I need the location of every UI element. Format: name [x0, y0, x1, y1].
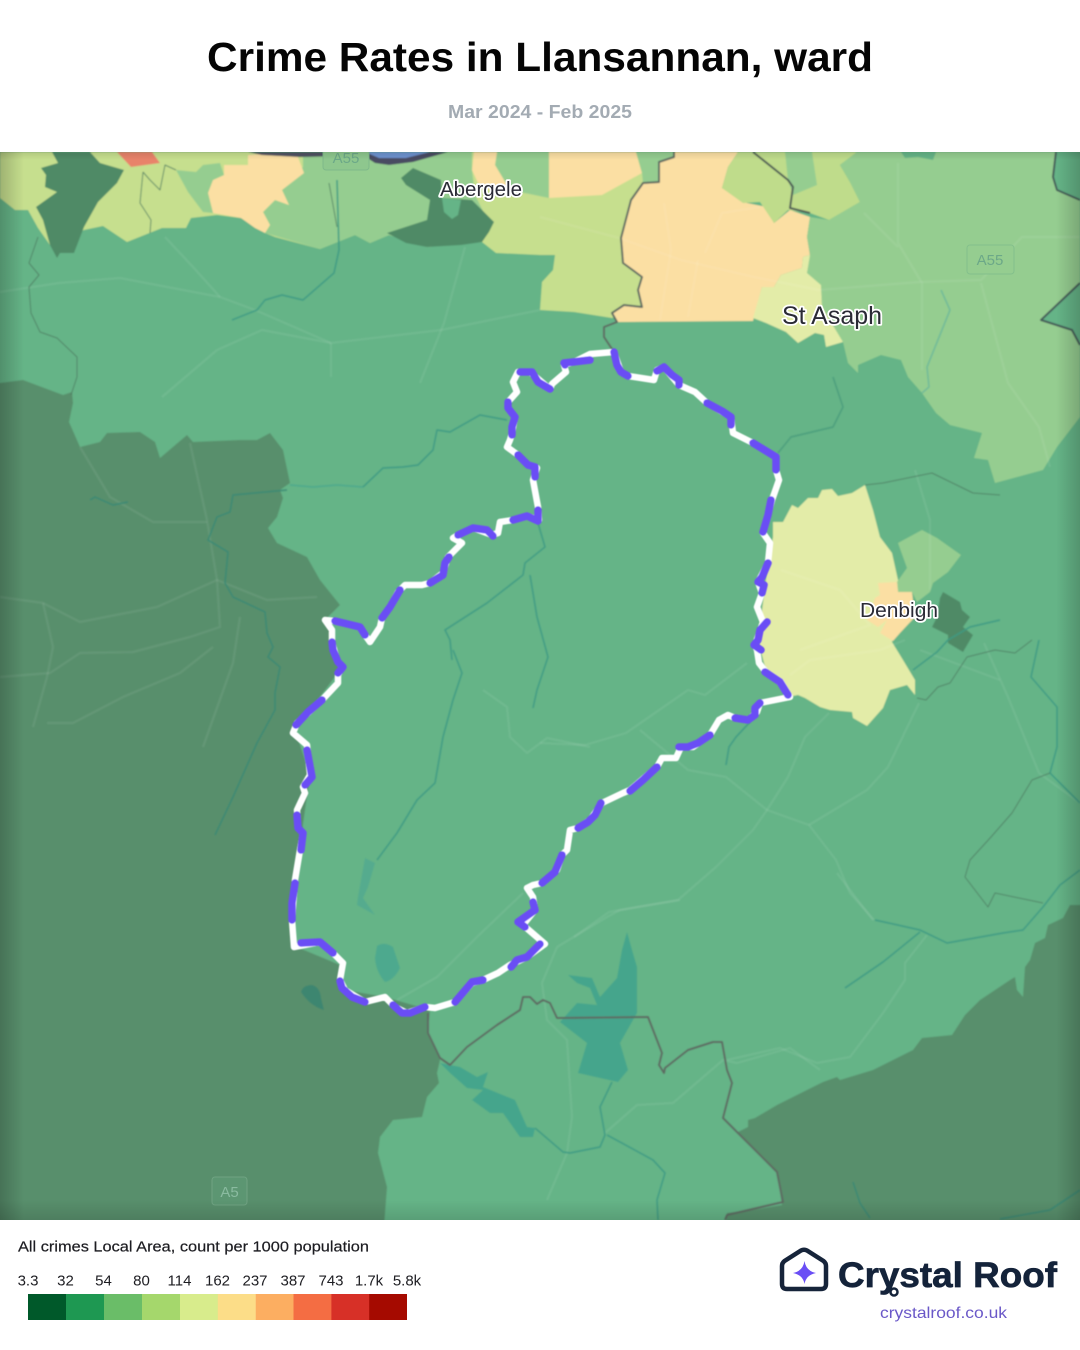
region: Denbigh pale yellow — [758, 485, 915, 726]
region: dark forest west top — [36, 152, 124, 258]
legend scale values: 743 — [318, 1272, 344, 1290]
lake: Alwen reservoir — [440, 1063, 535, 1137]
legend scale values: 80 — [133, 1272, 150, 1290]
legend scale values: 1.7k — [355, 1272, 384, 1290]
road badge: A55 east: A55 — [977, 252, 1003, 269]
legend scale values: 32 — [57, 1272, 74, 1290]
region: peach top left — [207, 152, 304, 233]
region: peach large town area — [612, 152, 810, 322]
region: dark forest near Abergele — [387, 168, 494, 247]
coast and sea — [248, 152, 448, 165]
title: Crime Rates in Llansannan, ward — [207, 34, 873, 80]
region: light green near Abergele — [263, 152, 490, 249]
region: peach strip — [471, 152, 506, 193]
region: dark upland west — [0, 380, 440, 1240]
lake: ward narrow lake — [357, 858, 375, 915]
legend scale values: 237 — [242, 1272, 268, 1290]
brand name: Crystal Roof — [838, 1255, 1057, 1295]
map edge vignette — [0, 152, 1080, 1220]
region: peach central top — [549, 152, 642, 198]
ward boundary purple dashes — [292, 352, 788, 1013]
region: red high crime area — [117, 152, 160, 167]
legend scale values: 114 — [168, 1272, 191, 1290]
county boundary lines — [428, 152, 1080, 1220]
region: small green patch — [442, 198, 461, 219]
region: dark green east of Denbigh — [932, 592, 973, 652]
region: light green north of Denbigh — [897, 530, 961, 602]
legend colour swatches — [28, 1294, 407, 1320]
region: light green top centre — [495, 152, 549, 198]
road badge: A5 south — [212, 1177, 247, 1205]
region: peach Denbigh centre — [867, 582, 915, 641]
region: light green east — [807, 152, 1080, 483]
icon: house with star — [782, 1250, 826, 1289]
road badge: A5 south: A5 — [220, 1184, 239, 1201]
road badge: A55 east — [967, 245, 1014, 274]
region: green patch by boundary — [785, 152, 817, 195]
ward boundary white line — [292, 352, 790, 1013]
icon: y descender key hook — [890, 1288, 898, 1296]
lake: Llyn Brenig — [560, 932, 637, 1082]
road badge: A55 top — [322, 152, 370, 170]
region: green strip top — [636, 152, 674, 183]
brand logo — [782, 1250, 1057, 1322]
region: St Asaph pale yellow — [753, 255, 843, 347]
region: dark upland south east — [725, 905, 1080, 1240]
road badge: A55 top: A55 — [333, 150, 359, 167]
legend scale values: 5.8k — [393, 1272, 422, 1290]
place label: Denbigh: Denbigh — [860, 599, 938, 622]
legend scale values — [18, 1272, 422, 1290]
place label: Abergele: Abergele — [440, 179, 522, 201]
legend scale values: 3.3 — [18, 1272, 38, 1290]
region: green wedge east — [1042, 284, 1080, 342]
region: light green patch — [176, 163, 224, 213]
place label: St Asaph: St Asaph — [782, 302, 882, 330]
lake: forest pond — [301, 985, 324, 1010]
region: lime northern band — [0, 152, 660, 318]
legend scale values: 54 — [95, 1272, 112, 1290]
region: lime north east cluster — [722, 152, 860, 223]
legend scale values: 162 — [205, 1272, 230, 1290]
thin boundary lines — [29, 165, 1050, 907]
region: small dark patch top — [901, 152, 936, 160]
ward boundary: Llansannan — [292, 352, 790, 1013]
legend — [18, 1238, 422, 1320]
legend scale values: 387 — [280, 1272, 306, 1290]
website url: crystalroof.co.uk — [880, 1305, 1008, 1322]
rivers — [90, 180, 1080, 1220]
legend title: All crimes Local Area, count per 1000 population — [18, 1238, 369, 1256]
road network — [0, 163, 1080, 1200]
date range subtitle: Mar 2024 - Feb 2025 — [448, 102, 632, 122]
lake: ward lake — [375, 944, 400, 982]
